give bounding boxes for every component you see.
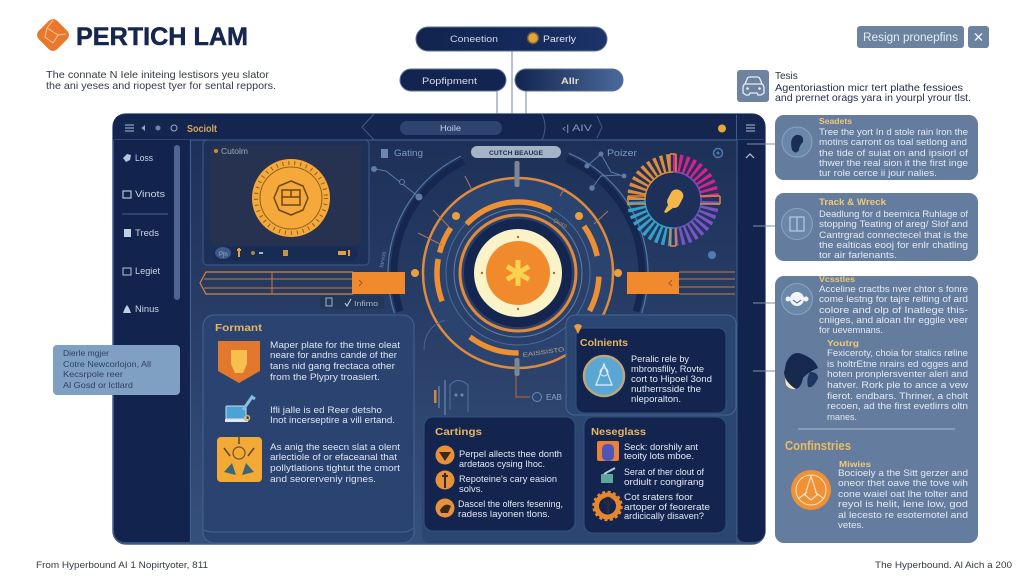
text: Seadets: tur role cerce ii jour nalies. (819, 168, 937, 179)
text: Youtrg: hatver. Rork ple to ance a vew (827, 380, 968, 391)
text: neseglass 2: Serat of ther clout of (624, 467, 704, 478)
text: Youtrg: fierot. endbars. Thriner, a cholt (827, 391, 968, 402)
text: neseglass 1: teoity lots mboe. (624, 451, 694, 462)
text: cartings 2 (459, 474, 557, 495)
tesis text block: Agentoriastion micr tert plathe fessioes (775, 82, 963, 94)
footer right: The Hyperbound. Al Aich a 200 (875, 560, 1012, 571)
text: cartings 1: Perpel allects thee donth (459, 449, 562, 460)
text: Track & Wreck: the ealticas eooj for enlr chatling (819, 240, 968, 251)
text: Track & Wreck: tor air farlenants. (819, 250, 897, 261)
icon: helmet badge (782, 284, 812, 314)
intro text: the ani yeses and riopest tyer for sental reppors. (46, 80, 276, 92)
panel: Colnients (566, 315, 736, 415)
icon: orange emblem (791, 470, 831, 510)
text: Track & Wreck: Deadlung for d beernica Ruhlage of (819, 209, 968, 220)
text: cartings 2: solvs. (459, 484, 483, 495)
heading: Colnients: Colnients (580, 337, 628, 349)
text: neseglass 3: ardicically disaven? (624, 511, 704, 522)
text: formant 2 (270, 405, 395, 426)
text: Colnients: nutherrsside the (631, 384, 701, 395)
heading: Youtrg: Youtrg (827, 338, 859, 348)
gauge title pill: CUTCH BEAUGE (489, 150, 543, 157)
central gauge: Dioro (552, 218, 568, 230)
icon: portrait (597, 441, 619, 461)
main dashboard panel (113, 103, 765, 544)
left sidebar (114, 140, 190, 542)
text: Seadets: the tide of suiat on and ipsiorl of (819, 148, 968, 159)
menu item: Ninus: Ninus (135, 304, 159, 315)
icon: car (737, 70, 769, 102)
text: Youtrg: is holtrEtne nrairs ed ogges and (827, 359, 968, 370)
gauge label: Gating: Gating (394, 148, 423, 158)
left callout: Al Gosd or lctlard (63, 380, 133, 390)
icon: book badge (782, 208, 812, 240)
left callout: Kecsrpole reer (63, 369, 123, 379)
central gauge (348, 103, 688, 443)
tesis text block: Tesis (775, 71, 798, 82)
text: Youtrg: recoen, ad the first evetlirrs oltn (827, 401, 968, 412)
connector ticks to right cards (747, 144, 776, 371)
icon: orange gear (594, 492, 622, 520)
coin panel: Cutolm (221, 147, 248, 156)
menu item: Ninus (123, 304, 159, 315)
text: Vcsstles: come lestng for tajre relting of ard (819, 294, 968, 305)
nav pill: Allr (515, 69, 623, 91)
icon: blue badge (584, 356, 624, 396)
coin toolbar (214, 247, 358, 261)
menu item: Vinots (123, 189, 165, 200)
heading: Cartings: Cartings (435, 426, 482, 438)
gauge label: Poizer (584, 148, 637, 191)
text: Colnients (631, 354, 712, 405)
card: Vcsstles / Youtrg / Confinstries (775, 274, 978, 543)
text: Miwies: al lecesto re esotemotel and (838, 510, 968, 521)
top bar (113, 114, 765, 140)
text: Youtrg: rnanes. (827, 412, 857, 423)
heading: Formant: Formant (215, 322, 263, 334)
icon: ear badge (782, 127, 812, 157)
colour wheel (628, 154, 720, 246)
menu item: Treds: Treds (135, 228, 159, 239)
button: Resign pronepfins (857, 26, 964, 48)
panel: Cartings (424, 417, 575, 531)
right orange bar (627, 272, 735, 294)
nav pill: Popfipment: Popfipment (422, 76, 477, 87)
icon: cartings 3 (436, 498, 454, 518)
left callout: Dierle mgjer (63, 348, 109, 358)
menu item: Legiet (123, 266, 160, 277)
heading: Vcsstles: Vcsstles (819, 274, 855, 284)
text: cartings 3 (458, 499, 563, 520)
icon: globe (784, 353, 818, 389)
text: Youtrg (827, 348, 968, 423)
left callout: Cotre Newcorlojon, All (63, 359, 151, 369)
top bar: ‹| AIV (562, 123, 592, 133)
logo: orange diamond (35, 17, 71, 53)
text: neseglass 3: Cot sraters foor (624, 492, 693, 503)
heading: Confinstries: Confinstries (785, 439, 851, 453)
menu item: Loss (123, 153, 153, 164)
nav pill: Coneetion / Parerly: Coneetion (450, 34, 498, 45)
gauge title pill (471, 146, 561, 158)
nav pill: Coneetion / Parerly: Parerly (543, 34, 576, 45)
icon: cartings 2 (436, 470, 454, 490)
text: Youtrg: hoten pronplersventer aleri and (827, 369, 968, 380)
label: EAB: EAB (546, 393, 562, 402)
button: close (968, 26, 989, 48)
text: Track & Wreck: Cantrgrad connectecel that is the (819, 230, 968, 241)
right sidebar (737, 140, 765, 542)
heading: Track & Wreck: Track & Wreck (819, 197, 887, 207)
left callout (53, 345, 180, 395)
gauge label: Poizer: Poizer (607, 148, 637, 158)
text: formant 2: Inot incerseptire a vill ertand. (270, 415, 395, 426)
icon: gold tile (217, 436, 262, 482)
text: Vcsstles: Acceline cractbs nver chtor s fonre (819, 284, 968, 295)
connector lines from nav pills (497, 51, 526, 115)
icon: info dot (714, 148, 722, 158)
text: cartings 2: Repoteine's cary easion (459, 474, 557, 485)
heading: Neseglass: Neseglass (591, 426, 646, 438)
small status chip: Infimo (354, 299, 378, 308)
text: formant 2: Ifli jalle is ed Reer detsho (270, 405, 382, 416)
text: formant 1: from the Plypry troasiert. (270, 372, 380, 383)
icon: laptop (225, 397, 255, 422)
text: Seadets: Tree the yort In d stole rain lron the (819, 127, 968, 138)
text: formant 3: pollytlations tightut the cmort (270, 463, 400, 474)
text: Seadets (819, 127, 968, 179)
text: neseglass 2 (624, 467, 704, 488)
icon: centre asterisk (507, 260, 529, 286)
text: cartings 3: Dascel the olfers fesening, (458, 499, 563, 510)
menu item: Legiet: Legiet (135, 266, 160, 277)
nav pill: Allr: Allr (561, 76, 579, 87)
text: Colnients: nleporalton. (631, 394, 681, 405)
text: formant 3 (270, 442, 400, 485)
intro text: The connate N Iele initeing lestisors yeu slator (46, 69, 270, 81)
central gauge: EAISSISTO (522, 347, 565, 359)
text: Miwies: reyol is helit, lene low, god (838, 499, 968, 510)
text: Colnients: mbronsfiliy, Rovte (631, 364, 704, 375)
tesis text block (775, 71, 971, 104)
text: cartings 3: radess layonen tlons. (458, 509, 550, 520)
left orange bar (200, 272, 405, 294)
panel: Neseglass (584, 417, 726, 533)
text: neseglass 1 (624, 442, 698, 462)
text: formant 3: As anig the seecn slat a olent (270, 442, 400, 453)
icon: blue dot (708, 251, 716, 259)
text: formant 1: tans nid gang frectaca other (270, 361, 395, 372)
text: Seadets: thwer the real sion it the first inge (819, 158, 968, 169)
text: Colnients: Peralic rele by (631, 354, 689, 365)
text: Miwies: oneor thet oave the tove wih (838, 478, 968, 489)
text: Vcsstles: colore and olp of Inatlege this- (819, 305, 968, 316)
icon: shield face (218, 341, 260, 383)
text: formant 1 (270, 340, 400, 383)
lower centre panel (422, 320, 736, 543)
text: Miwies: vetes. (838, 520, 864, 531)
text: neseglass 2: ordiult r congirang (624, 477, 704, 488)
menu item: Treds (124, 228, 159, 239)
text: Vcsstles: for uevemnans. (819, 325, 883, 336)
text: Colnients: cort to Hipoel 3ond (631, 374, 712, 385)
text: Miwies: Bocioely a the Sitt gerzer and (838, 468, 968, 479)
intro text (46, 69, 276, 92)
top bar: Hoile (440, 123, 461, 133)
card: Track & Wreck (775, 193, 978, 261)
nav pill: Popfipment (400, 69, 506, 91)
icon: key (664, 187, 685, 213)
text: neseglass 3 (624, 492, 710, 522)
text: cartings 1 (459, 449, 562, 470)
menu item: Loss: Loss (135, 153, 153, 164)
text: cartings 1: ardetaos cysing Ihoc. (459, 459, 545, 470)
nav pill: Coneetion / Parerly (416, 27, 607, 51)
text: formant 1: neare for andns cande of ther (270, 350, 397, 361)
text: formant 3: and seorerveniy rignes. (270, 474, 376, 485)
label: EAB (532, 392, 562, 402)
panel: Formant (203, 315, 414, 543)
coin toolbar: Pjn (219, 252, 228, 258)
heading: Seadets: Seadets (819, 116, 852, 126)
menu item: Vinots: Vinots (135, 189, 165, 200)
text: neseglass 1: Seck: dorshily ant (624, 442, 698, 453)
text: Seadets: motins carront os toal setlong and (819, 137, 967, 148)
text: neseglass 3: artoper of feorerate (624, 502, 710, 513)
heading: Miwies: Miwies (839, 459, 871, 469)
text: Track & Wreck: stopping Teating of areg/ Slof and (819, 219, 968, 230)
icon: gold coin (252, 159, 330, 237)
text: formant 3: arlectiole of or efaceanal that (270, 452, 397, 463)
button: Resign pronepfins: Resign pronepfins (863, 32, 958, 44)
icon: tools (601, 468, 615, 483)
text: Youtrg: Fexiceroty, choia for stalics røline (827, 348, 968, 359)
gauge label: Gating (381, 148, 423, 158)
card: Seadets (775, 115, 978, 180)
coin panel (203, 140, 369, 265)
small status chip (320, 296, 384, 309)
gauge circuit lines left (372, 166, 422, 200)
text: Track & Wreck (819, 209, 968, 261)
text: Vcsstles (819, 284, 968, 336)
icon: cartings 1 (436, 446, 454, 464)
text: Vcsstles: cniiges, and aloan thr eggile veer (819, 315, 968, 326)
central gauge: Iarvos (379, 251, 388, 268)
footer left: From Hyperbound AI 1 Nopirtyoter, 811 (36, 560, 208, 571)
title: PERTICH LAM (76, 23, 248, 51)
text: formant 1: Maper plate for the time oleat (270, 340, 400, 351)
tesis text block: and prernet orags yara in yourpl yrour tlst. (775, 92, 971, 104)
top bar: Sociolt (187, 124, 218, 135)
text: Miwies (838, 468, 968, 531)
text: Miwies: cone waiel oat lhe tolter and (838, 489, 968, 500)
icon: sound waves (434, 380, 468, 415)
